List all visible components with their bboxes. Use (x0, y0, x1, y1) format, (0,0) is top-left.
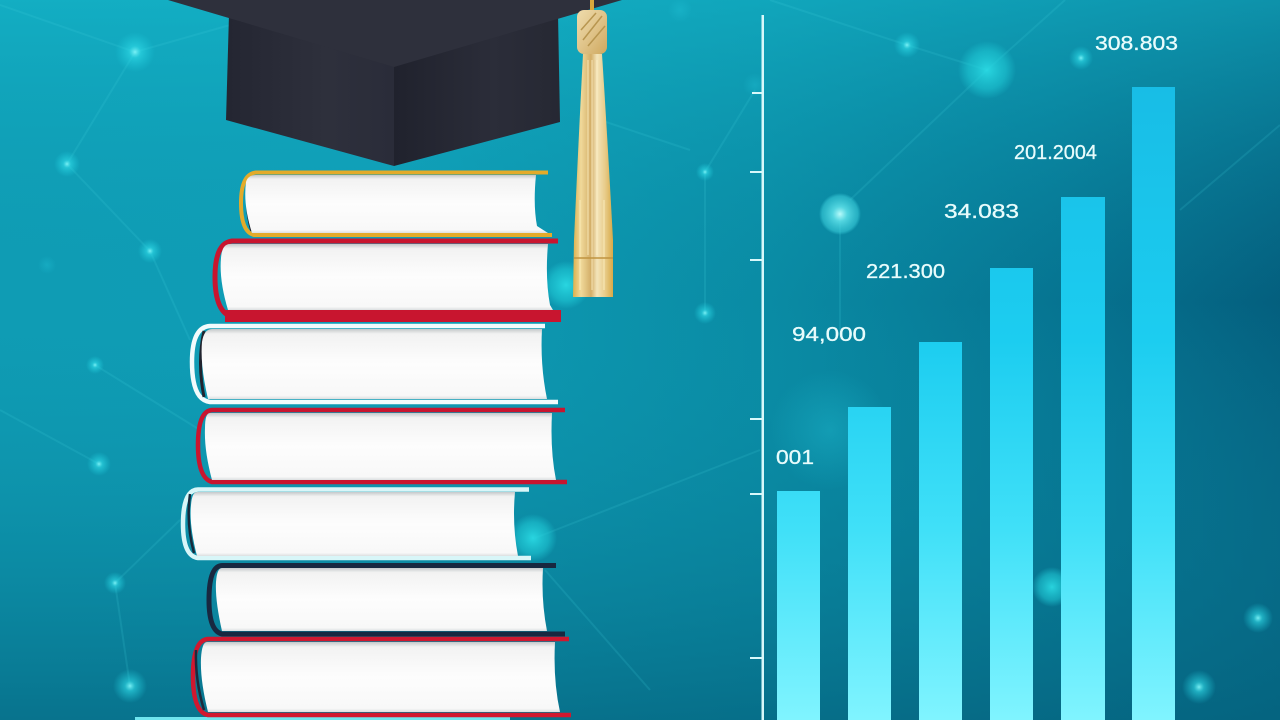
chart axis (750, 15, 764, 720)
cord (590, 0, 594, 12)
strands (573, 54, 613, 297)
book 3: white cover (192, 326, 558, 402)
bar value labels: 001 (776, 447, 814, 469)
book 4: red cover (198, 410, 567, 482)
bar value labels: 34.083 (944, 201, 1019, 223)
book 1: yellow cover (241, 172, 552, 235)
book 7: red cover (193, 639, 571, 715)
book 6: navy cover (209, 566, 565, 634)
graduation cap (168, 0, 622, 166)
cap body (226, 14, 394, 166)
bar value labels: 201.2004 (1014, 142, 1097, 164)
bar value labels: 308.803 (1095, 33, 1178, 55)
bar value labels: 94,000 (792, 324, 866, 346)
book 5: white cover with teal edge (183, 490, 531, 558)
cap board (168, 0, 622, 67)
book 2: red cover (215, 241, 561, 322)
bar chart (777, 87, 1175, 720)
base line under stack (135, 717, 510, 720)
tassel (573, 0, 613, 297)
bar value labels: 221.300 (866, 261, 945, 283)
bar value labels (776, 33, 1178, 469)
book stack (135, 172, 571, 720)
knot (577, 10, 607, 54)
